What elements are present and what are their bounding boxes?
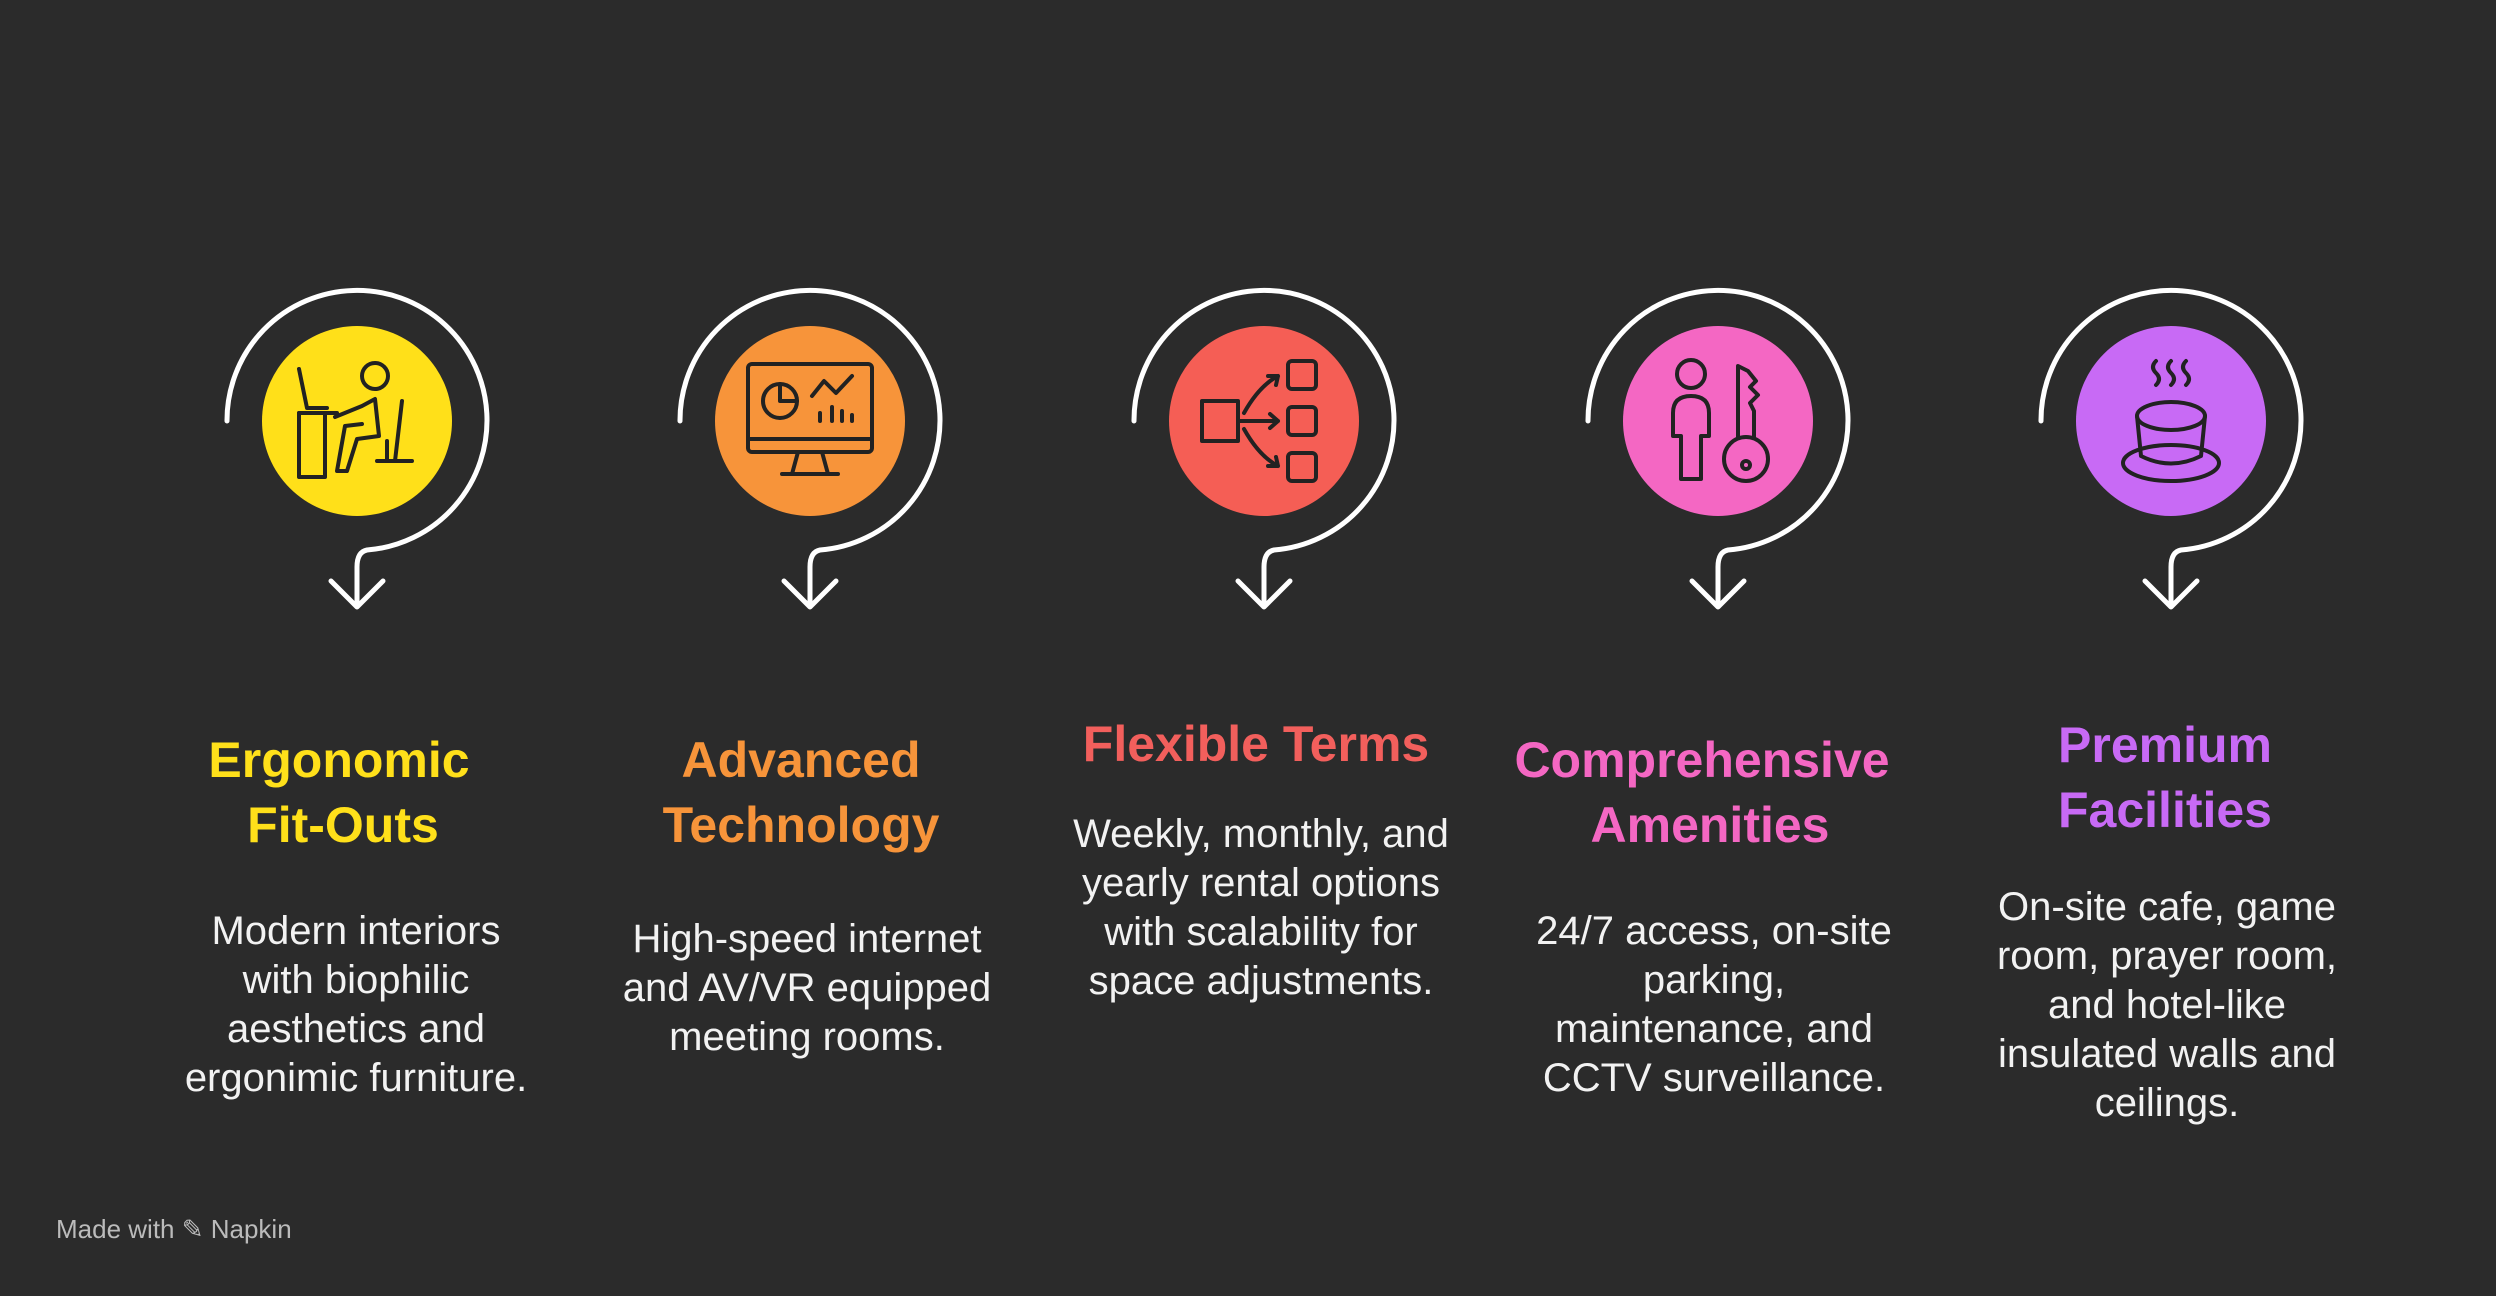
text: ergonomic fit-outs: ergonimic furniture. <box>185 1056 527 1100</box>
text: advanced technology: and AV/VR equipped <box>623 966 991 1010</box>
icon: branching squares <box>1169 326 1359 516</box>
text: ergonomic fit-outs: Fit-Outs <box>247 797 439 853</box>
text: comprehensive amenities: Comprehensive <box>1514 732 1890 788</box>
text: advanced technology: High-speed internet <box>632 917 982 961</box>
step 1: ergonomic fit-outs <box>227 290 487 607</box>
text: comprehensive amenities: parking, <box>1643 958 1785 1002</box>
text: flexible terms: Weekly, monthly, and <box>1073 812 1449 856</box>
text: flexible terms: yearly rental options <box>1082 861 1440 905</box>
watermark: Made with ✎ Napkin <box>56 1214 292 1244</box>
step 3: flexible terms <box>1134 290 1394 607</box>
text: premium facilities: Facilities <box>2058 782 2272 838</box>
text: ergonomic fit-outs: aesthetics and <box>227 1007 485 1051</box>
step 2: advanced technology <box>680 290 940 607</box>
text: flexible terms: space adjustments. <box>1089 959 1433 1003</box>
arrow arc 1 <box>227 290 487 607</box>
text: comprehensive amenities: Amenities <box>1591 797 1829 853</box>
arrow arc 3 <box>1134 290 1394 607</box>
icon: person at desk <box>262 326 452 516</box>
text: comprehensive amenities: 24/7 access, on-site <box>1536 909 1892 953</box>
text: comprehensive amenities: maintenance, and <box>1555 1007 1873 1051</box>
text: advanced technology: Advanced <box>682 732 920 788</box>
text: premium facilities <box>1997 717 2337 1125</box>
text: comprehensive amenities: CCTV surveillance. <box>1543 1056 1885 1100</box>
text: flexible terms: Flexible Terms <box>1083 716 1429 772</box>
icon: person and key <box>1623 326 1813 516</box>
text: ergonomic fit-outs: Ergonomic <box>208 732 470 788</box>
text: premium facilities: room, prayer room, <box>1997 934 2337 978</box>
arrow arc 4 <box>1588 290 1848 607</box>
arrow arc 5 <box>2041 290 2301 607</box>
text: premium facilities: Premium <box>2058 717 2272 773</box>
step 4: comprehensive amenities <box>1588 290 1848 607</box>
text: premium facilities: ceilings. <box>2095 1081 2239 1125</box>
text: ergonomic fit-outs <box>185 732 527 1100</box>
arrow arc 2 <box>680 290 940 607</box>
text: advanced technology: meeting rooms. <box>669 1015 945 1059</box>
text: premium facilities: On-site cafe, game <box>1998 885 2336 929</box>
step 5: premium facilities <box>2041 290 2301 607</box>
text: flexible terms <box>1073 716 1449 1003</box>
icon: monitor with charts <box>715 326 905 516</box>
text: ergonomic fit-outs: with biophilic <box>242 958 469 1002</box>
text: flexible terms: with scalability for <box>1103 910 1418 954</box>
text: advanced technology: Technology <box>663 797 940 853</box>
text: premium facilities: and hotel-like <box>2048 983 2286 1027</box>
icon: coffee cup with steam <box>2076 326 2266 516</box>
text: comprehensive amenities <box>1514 732 1892 1100</box>
text: ergonomic fit-outs: Modern interiors <box>211 909 501 953</box>
text: premium facilities: insulated walls and <box>1998 1032 2336 1076</box>
text: advanced technology <box>623 732 991 1059</box>
